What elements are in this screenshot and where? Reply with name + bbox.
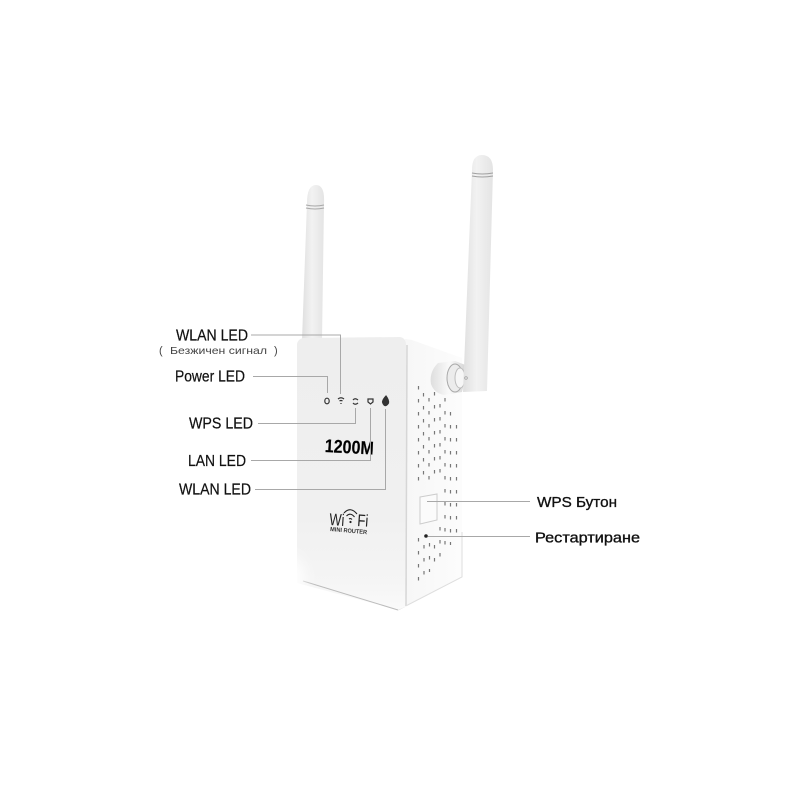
icon: power LED	[325, 398, 329, 404]
leader lines	[251, 335, 530, 536]
label: WPS LED: WPS LED	[189, 416, 253, 432]
Wi-Fi logo	[329, 510, 369, 531]
LED icons	[325, 396, 389, 406]
reset pinhole	[424, 534, 428, 538]
label: reset: Рестартиране	[535, 530, 640, 546]
Wi-Fi logo: Fi	[357, 511, 369, 531]
label: Power LED: Power LED	[175, 368, 245, 386]
label: wireless signal note: (	[159, 345, 163, 357]
WPS button	[420, 494, 437, 524]
MINI ROUTER label: MINI ROUTER	[330, 527, 368, 536]
model label 1200M: 1200M	[324, 435, 374, 459]
router side panel	[398, 339, 462, 610]
label: wireless signal note	[159, 345, 278, 357]
label: LAN LED: LAN LED	[188, 453, 246, 470]
icon: WPS LED	[353, 399, 358, 404]
label: wireless signal note: Безжичен сигнал	[170, 345, 267, 357]
label: WLAN LED: WLAN LED	[176, 328, 248, 344]
antenna hinge	[431, 361, 468, 395]
label: WPS button: WPS Бутон	[537, 494, 617, 511]
Wi-Fi logo: Wi	[329, 510, 345, 530]
router front panel	[272, 337, 407, 610]
label: WLAN LED second: WLAN LED	[179, 482, 251, 498]
icon: WLAN globe LED	[382, 396, 389, 406]
icon: wireless LED	[338, 398, 344, 404]
icon: wifi waves	[344, 510, 357, 520]
right antenna	[463, 155, 493, 392]
left antenna	[302, 185, 324, 340]
label: wireless signal note: )	[274, 345, 278, 357]
icon: LAN LED	[368, 399, 373, 404]
side vents	[418, 386, 456, 584]
